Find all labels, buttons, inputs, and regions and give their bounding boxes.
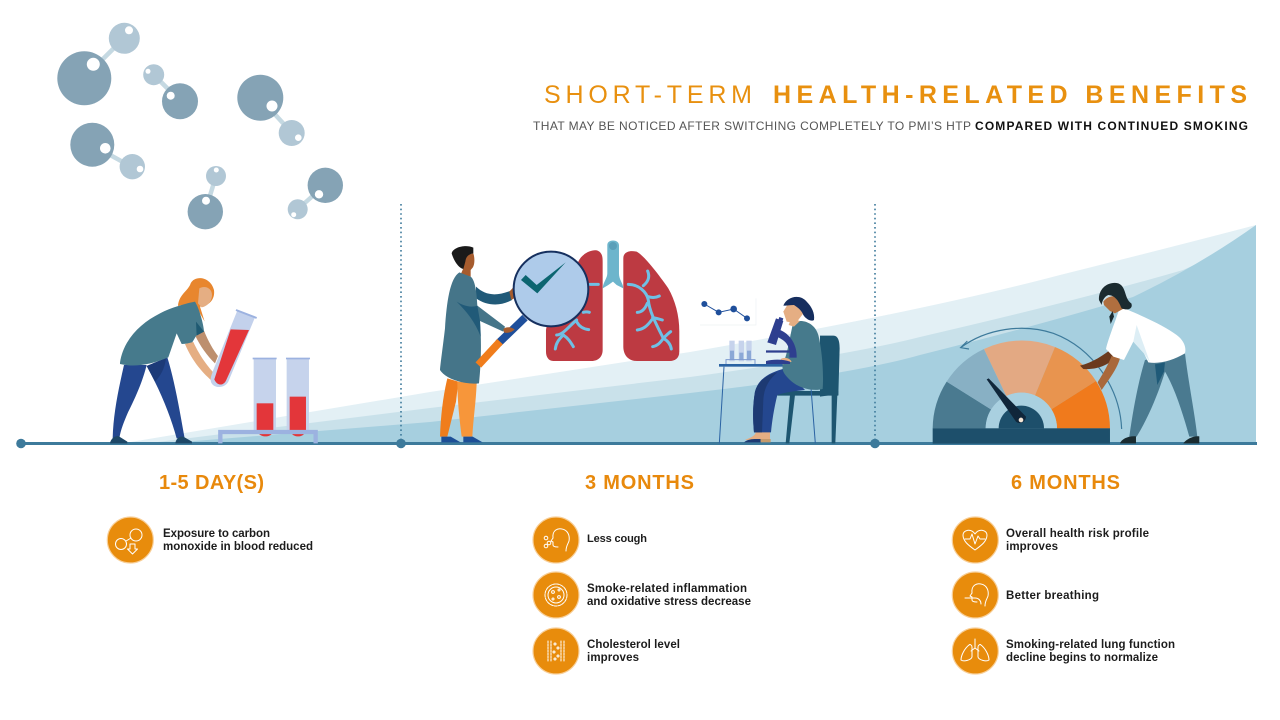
icon: lungs <box>952 628 998 674</box>
benefit text: improves <box>1006 541 1058 553</box>
benefit: better breathing <box>952 572 1099 618</box>
benefit text: Exposure to carbon <box>163 528 270 540</box>
benefit: health risk profile <box>952 517 1149 563</box>
rotation arrow <box>961 328 1122 429</box>
illustration: woman with test tubes <box>110 278 316 443</box>
benefit text: and oxidative stress decrease <box>587 596 751 608</box>
icon: head breathing <box>952 572 998 618</box>
benefit: less cough <box>533 517 647 563</box>
molecules cluster <box>57 23 343 229</box>
subtitle: THAT MAY BE NOTICED AFTER SWITCHING COMPLETELY TO PMI’S HTP <box>533 119 971 133</box>
benefit text: decline begins to normalize <box>1006 652 1158 664</box>
illustration: lungs and man with magnifier <box>440 240 679 442</box>
woman <box>1080 283 1199 443</box>
illustration: gauge and woman adjusting it <box>933 283 1199 444</box>
benefit text <box>587 639 680 664</box>
benefit: lung function <box>952 628 1175 674</box>
chair <box>777 336 840 443</box>
benefit text <box>1006 528 1149 553</box>
column heading: 3 months: 3 MONTHS <box>585 472 694 494</box>
title <box>544 81 1247 109</box>
icon: molecules with down arrow <box>107 517 153 563</box>
rising wedge background <box>125 225 1256 443</box>
benefit text <box>163 528 313 553</box>
column heading: 6 months: 6 MONTHS <box>1011 472 1120 494</box>
timeline <box>16 204 1257 448</box>
gauge <box>933 341 1110 444</box>
icon: heart with pulse <box>952 517 998 563</box>
title: SHORT-TERM <box>544 81 752 109</box>
benefit text: Overall health risk profile <box>1006 528 1149 540</box>
table and tubes <box>719 341 815 443</box>
benefit: cholesterol <box>533 628 680 674</box>
benefit text: Smoke-related inflammation <box>587 583 747 595</box>
subtitle <box>533 119 1248 133</box>
line chart card <box>700 298 756 325</box>
column heading: 1-5 days: 1-5 DAY(S) <box>159 472 264 494</box>
benefit text: Better breathing <box>1006 590 1099 602</box>
subtitle: COMPARED WITH CONTINUED SMOKING <box>975 119 1248 133</box>
benefit: inflammation <box>533 572 751 618</box>
icon: coughing head <box>533 517 579 563</box>
benefit: carbon monoxide <box>107 517 313 563</box>
benefit text <box>1006 639 1175 664</box>
illustration: scientist at microscope <box>700 297 840 443</box>
scientist <box>744 297 823 442</box>
magnifier lens with check mark <box>514 252 588 326</box>
magnifier handle <box>478 318 525 365</box>
benefit text: monoxide in blood reduced <box>163 541 313 553</box>
lungs <box>546 240 679 361</box>
man <box>440 246 514 442</box>
benefit text: improves <box>587 652 639 664</box>
icon: artery with particles <box>533 628 579 674</box>
benefit text <box>587 583 751 608</box>
benefit text: Cholesterol level <box>587 639 680 651</box>
benefit text: Less cough <box>587 533 647 545</box>
icon: inflamed cell <box>533 572 579 618</box>
title: HEALTH-RELATED BENEFITS <box>773 81 1247 109</box>
benefit text: Smoking-related lung function <box>1006 639 1175 651</box>
